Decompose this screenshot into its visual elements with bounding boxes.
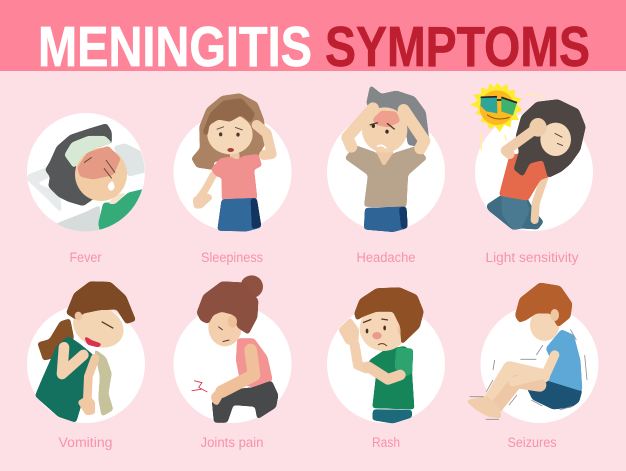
illustration: boy with rash on arm — [338, 287, 424, 423]
illustration: boy having seizure — [466, 283, 587, 419]
label: Sleepiness: Sleepiness — [201, 250, 263, 265]
panel: joints pain — [174, 275, 292, 450]
illustration: woman shielding eyes from sun — [470, 83, 586, 230]
circle background — [27, 305, 145, 423]
panel: vomiting — [27, 281, 145, 450]
panel: rash — [327, 287, 445, 450]
label: Joints pain: Joints pain — [200, 435, 264, 450]
label: Fever: Fever — [70, 250, 102, 265]
circle background — [174, 305, 292, 423]
circle background — [475, 113, 593, 231]
header banner — [0, 0, 626, 79]
label: Vomiting: Vomiting — [58, 435, 112, 450]
panel: light sensitivity — [470, 83, 593, 265]
illustration: girl vomiting — [35, 281, 136, 423]
title — [38, 15, 590, 79]
icon: sun with sunglasses — [470, 83, 522, 132]
panel: seizures — [466, 283, 598, 450]
illustration: sick man in bed — [27, 123, 148, 237]
panel: fever — [27, 113, 148, 265]
illustration: tired woman — [191, 93, 272, 231]
circle background — [27, 113, 145, 231]
label: Seizures: Seizures — [508, 435, 557, 450]
circle background — [174, 113, 292, 231]
panel: sleepiness — [174, 93, 292, 265]
label: Headache: Headache — [356, 250, 416, 265]
panel: headache — [327, 85, 445, 265]
title: MENINGITIS — [38, 15, 312, 79]
circle background — [480, 305, 598, 423]
label: Light sensitivity: Light sensitivity — [486, 250, 579, 265]
label: Rash: Rash — [372, 435, 400, 450]
circle background — [327, 305, 445, 423]
circle background — [327, 113, 445, 231]
illustration: woman holding knee — [192, 275, 278, 423]
illustration: man holding head — [345, 85, 429, 232]
